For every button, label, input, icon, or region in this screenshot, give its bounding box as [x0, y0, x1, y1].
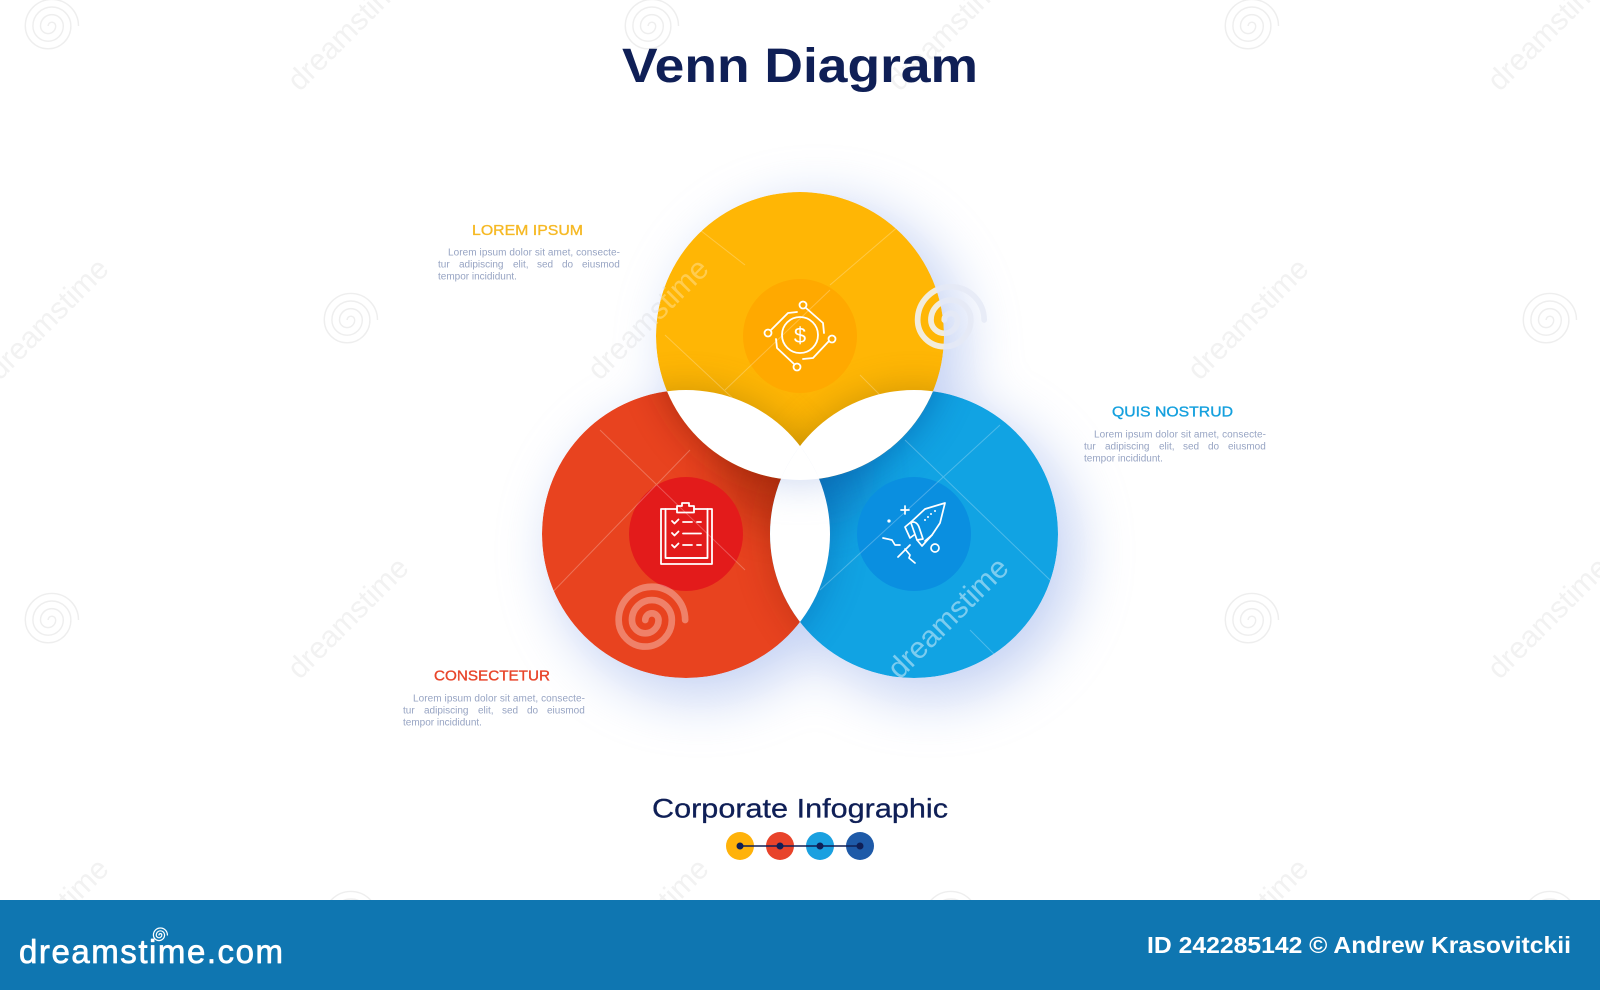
text block: quis nostrud: tur	[1084, 442, 1096, 453]
soft shadows	[554, 204, 1076, 698]
text block: lorem ipsum: sed	[537, 260, 553, 271]
watermark pattern: dreamstime	[281, 551, 415, 685]
icon: clipboard checklist	[661, 503, 712, 564]
circle: red	[542, 391, 800, 678]
watermark pattern: dreamstime	[581, 252, 715, 386]
watermark pattern: dreamstime	[1181, 852, 1315, 986]
text block: consectetur: adipiscing	[424, 706, 468, 717]
text block: quis nostrud: elit,	[1159, 442, 1175, 453]
timeline dots	[726, 832, 874, 860]
text block: lorem ipsum	[438, 222, 620, 283]
text block: consectetur: tempor incididunt.	[403, 718, 482, 729]
text block: consectetur: elit,	[478, 706, 494, 717]
text block: quis nostrud: do	[1208, 442, 1220, 453]
heading: QUIS NOSTRUD	[1112, 404, 1233, 420]
text block: consectetur: eiusmod	[547, 706, 585, 717]
text block: lorem ipsum: tur	[438, 260, 450, 271]
text block: consectetur: do	[527, 706, 539, 717]
text block: lorem ipsum: eiusmod	[582, 260, 620, 271]
footer credit: ID 242285142 © Andrew Krasovitckii	[1147, 932, 1571, 958]
text block: lorem ipsum: elit,	[513, 260, 529, 271]
text block: quis nostrud	[1084, 404, 1266, 465]
circle: yellow	[656, 192, 944, 479]
text block: lorem ipsum: do	[562, 260, 574, 271]
text block: quis nostrud: tempor incididunt.	[1084, 454, 1163, 465]
icon disc: yellow	[743, 279, 857, 393]
text block: consectetur: tur	[403, 706, 415, 717]
icon: footer spiral	[153, 928, 167, 941]
circle: blue	[770, 391, 1058, 678]
body: Lorem ipsum dolor sit amet, consecte-	[1094, 430, 1266, 441]
body: Lorem ipsum dolor sit amet, consecte-	[448, 248, 620, 259]
watermark pattern: dreamstime	[1181, 252, 1315, 386]
lens: yellow and blue overlap	[800, 390, 933, 479]
subtitle: Corporate Infographic	[652, 794, 948, 824]
text block: lorem ipsum: tempor incididunt.	[438, 272, 517, 283]
text block: quis nostrud: eiusmod	[1228, 442, 1266, 453]
text block: quis nostrud: adipiscing	[1105, 442, 1149, 453]
watermark over circles: dreamstime	[881, 551, 1015, 685]
text block: consectetur	[403, 668, 585, 729]
icon disc: red	[629, 477, 743, 591]
watermark over circles	[545, 225, 1060, 685]
icon disc: blue	[857, 477, 971, 591]
body: Lorem ipsum dolor sit amet, consecte-	[413, 694, 585, 705]
lens: yellow and red overlap	[667, 390, 800, 479]
footer brand: dreamstime.com	[19, 933, 283, 970]
footer bar	[0, 900, 1600, 990]
text block: lorem ipsum: adipiscing	[459, 260, 503, 271]
lens: red and blue overlap	[770, 446, 830, 622]
text block: quis nostrud: sed	[1183, 442, 1199, 453]
watermark over circles: dreamstime	[581, 252, 715, 386]
icon: rocket	[883, 503, 945, 563]
text block: consectetur: sed	[502, 706, 518, 717]
venn diagram	[540, 186, 1076, 734]
icon: dollar network: $	[794, 323, 806, 348]
heading: LOREM IPSUM	[472, 222, 583, 239]
title: Venn Diagram	[622, 40, 978, 93]
icon: dollar network	[764, 302, 836, 370]
heading: CONSECTETUR	[434, 668, 550, 685]
watermark pattern: dreamstime	[581, 852, 715, 986]
